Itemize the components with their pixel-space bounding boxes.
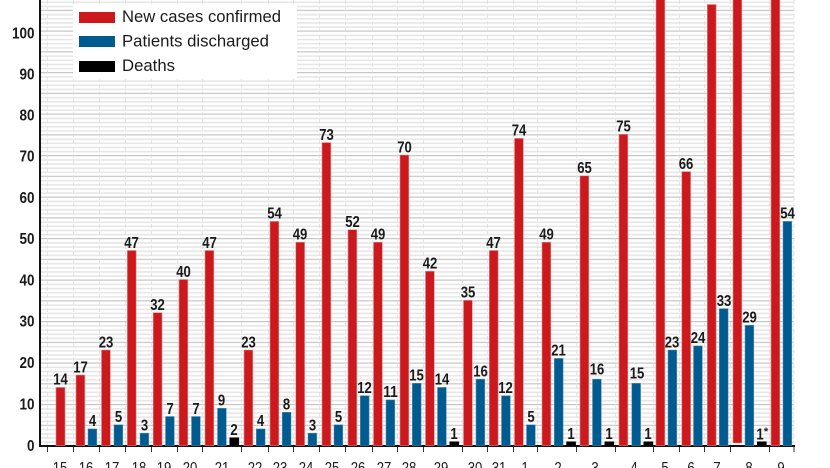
value labels: deaths: 1 (644, 426, 652, 443)
value labels: new cases: 47 (202, 235, 217, 252)
value labels: patients discharged: 4 (89, 413, 96, 430)
value labels: patients discharged: 12 (357, 380, 372, 397)
value labels: patients discharged: 4 (257, 413, 264, 430)
value labels: patients discharged: 8 (283, 397, 290, 414)
value labels: patients discharged: 21 (551, 343, 566, 360)
y axis labels: 70 (20, 148, 35, 166)
legend: Patients discharged (122, 32, 269, 50)
value labels: new cases: 23 (99, 334, 114, 351)
deaths bars (230, 438, 767, 446)
value labels: patients discharged (89, 206, 795, 434)
value labels: new cases: 40 (176, 264, 191, 281)
value labels: patients discharged: 14 (435, 372, 450, 389)
value labels: patients discharged: 5 (335, 409, 342, 426)
value labels: deaths: 1 (756, 426, 764, 444)
y axis labels: 50 (20, 231, 35, 248)
y axis labels: 80 (20, 108, 35, 124)
legend: New cases confirmed (122, 7, 281, 26)
value labels: patients discharged: 29 (742, 310, 757, 326)
value labels: deaths: 2 (230, 422, 238, 439)
value labels: deaths: 1 (450, 426, 458, 443)
value labels: new cases: 74 (512, 123, 527, 140)
value labels: patients discharged: 11 (383, 384, 398, 401)
value labels: deaths (230, 422, 769, 444)
y axis labels: 0 (27, 438, 35, 455)
value labels: new cases: 75 (616, 119, 631, 136)
value labels: deaths: * (764, 426, 769, 438)
value labels: new cases: 47 (486, 235, 501, 252)
value labels: patients discharged: 23 (665, 334, 680, 351)
value labels: patients discharged: 7 (192, 401, 200, 418)
value labels: new cases: 42 (423, 256, 437, 272)
y axis labels (12, 26, 35, 455)
value labels: new cases: 54 (267, 206, 282, 223)
value labels: deaths: 1 (567, 426, 575, 443)
value labels: patients discharged: 9 (218, 392, 225, 410)
value labels: new cases: 65 (577, 160, 592, 177)
value labels: new cases: 32 (150, 297, 165, 314)
value labels: new cases: 49 (293, 226, 308, 244)
y axis labels: 90 (20, 66, 35, 84)
y axis labels: 30 (20, 314, 35, 330)
value labels: patients discharged: 5 (115, 409, 122, 426)
value labels: new cases: 14 (53, 372, 68, 389)
value labels: patients discharged: 7 (166, 401, 174, 418)
value labels: deaths: 1 (605, 426, 613, 443)
value labels: patients discharged: 3 (141, 417, 148, 434)
value labels: new cases (53, 119, 694, 389)
value labels: new cases: 17 (73, 359, 88, 376)
legend (73, 5, 297, 79)
value labels: patients discharged: 15 (630, 366, 645, 382)
value labels: patients discharged: 33 (717, 293, 732, 310)
value labels: patients discharged: 54 (780, 206, 795, 223)
y axis labels: 60 (20, 190, 35, 207)
value labels: new cases: 66 (679, 156, 694, 173)
value labels: patients discharged: 16 (473, 363, 488, 380)
patients discharged bars (88, 221, 792, 446)
value labels: new cases: 49 (539, 226, 554, 244)
value labels: new cases: 70 (397, 140, 412, 156)
y axis labels: 100 (12, 26, 35, 42)
value labels: new cases: 73 (319, 127, 334, 144)
value labels: new cases: 23 (241, 334, 256, 351)
value labels: patients discharged: 24 (691, 330, 706, 347)
value labels: patients discharged: 3 (309, 417, 316, 434)
value labels: new cases: 47 (124, 235, 139, 252)
value labels: new cases: 35 (461, 285, 476, 302)
value labels: new cases: 49 (371, 226, 386, 244)
value labels: patients discharged: 15 (409, 368, 424, 385)
y axis labels: 40 (20, 272, 35, 290)
value labels: patients discharged: 12 (498, 380, 513, 397)
y axis labels: 10 (20, 396, 35, 414)
value labels: patients discharged: 16 (590, 362, 605, 378)
value labels: new cases: 52 (345, 214, 360, 231)
x axis dates (53, 460, 785, 468)
legend: Deaths (122, 56, 175, 75)
y axis labels: 20 (20, 355, 35, 372)
value labels: patients discharged: 5 (527, 409, 535, 426)
